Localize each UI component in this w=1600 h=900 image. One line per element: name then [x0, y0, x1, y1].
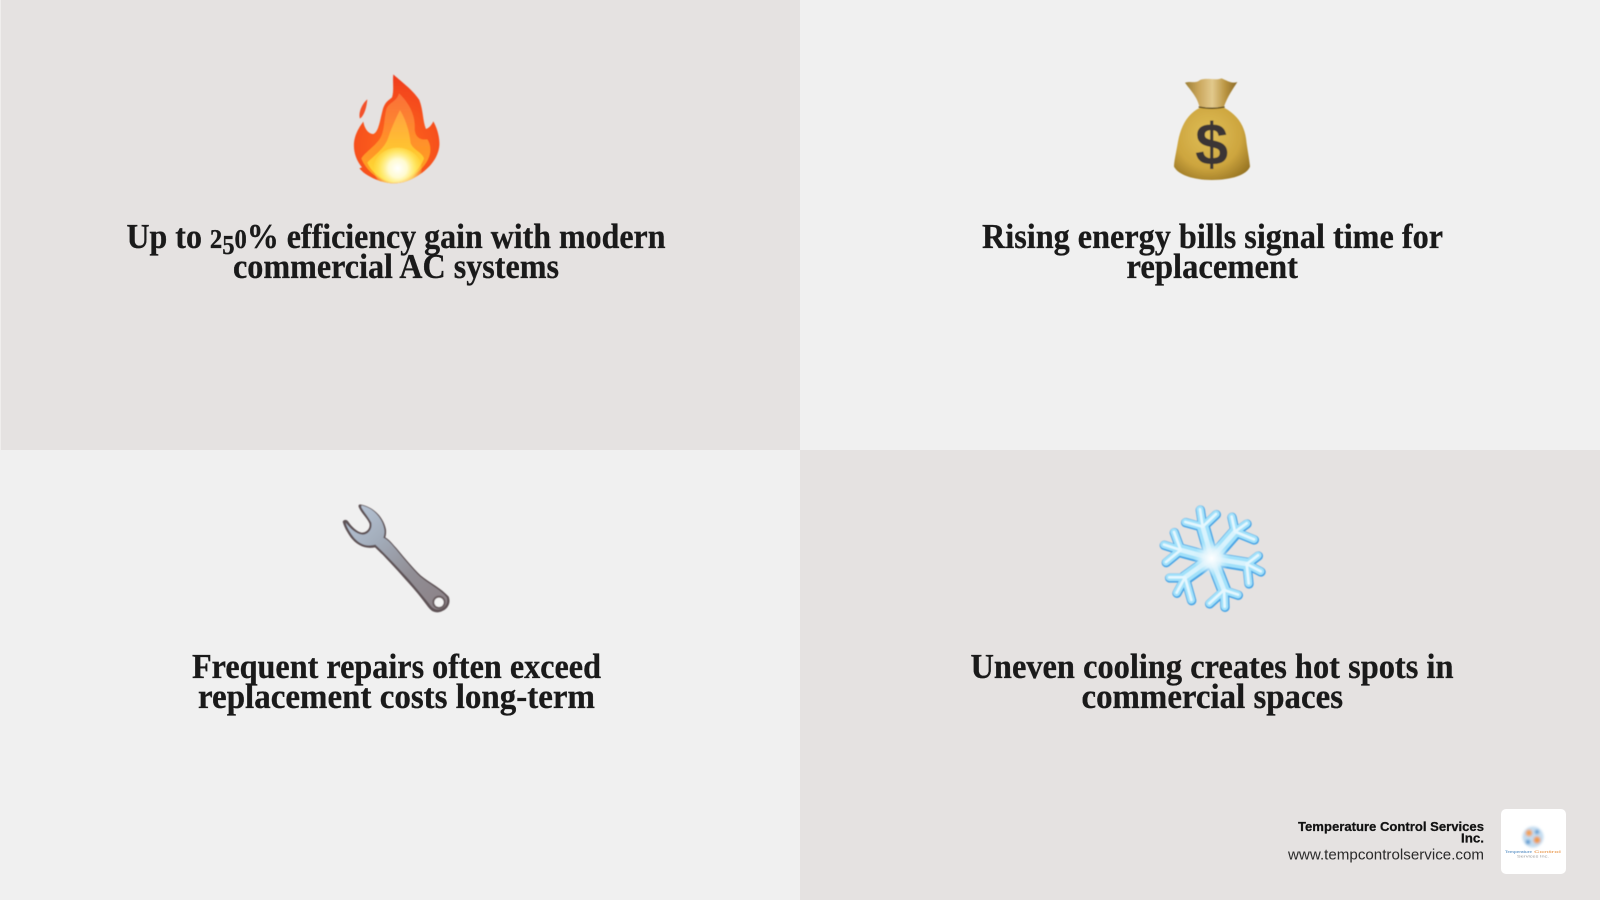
heading: energy bills: Rising energy bills signal time for: [982, 217, 1443, 256]
footer: company name and website: [1287, 819, 1484, 864]
panel: uneven cooling: [800, 450, 1600, 900]
icon: fire: [354, 74, 439, 189]
icon: money bag: [1174, 78, 1250, 180]
panel: efficiency: [0, 0, 800, 450]
icon: snowflake: [1164, 509, 1261, 607]
heading: efficiency: % efficiency gain with modern: [247, 217, 706, 256]
logo badge: [1501, 809, 1566, 874]
heading: repairs: Frequent repairs often exceed: [192, 647, 601, 686]
footer: company name and website: www.tempcontrolservice.com: [1287, 848, 1484, 864]
heading: efficiency: 0: [235, 224, 247, 254]
heading: uneven cooling: [970, 647, 1454, 716]
footer: company name and website: Inc.: [1461, 830, 1484, 846]
logo text: Control: [1534, 850, 1561, 854]
heading: repairs: [192, 647, 601, 716]
icon: wrench: [343, 504, 450, 612]
heading: energy bills: replacement: [1126, 247, 1298, 286]
logo text: Temperature: [1505, 850, 1532, 854]
icon: money bag: $: [1195, 110, 1228, 177]
footer: company name and website: Temperature Control Services: [1298, 819, 1484, 834]
logo mark: [1522, 826, 1544, 848]
panel: repairs: [0, 450, 800, 900]
logo text: [1505, 850, 1561, 858]
logo text: Services Inc.: [1517, 854, 1549, 858]
heading: efficiency: Up to 2: [126, 217, 223, 256]
heading: efficiency: [126, 217, 666, 286]
heading: uneven cooling: commercial spaces: [1082, 677, 1343, 716]
heading: repairs: replacement costs long-term: [198, 677, 595, 716]
heading: energy bills: [982, 217, 1443, 286]
heading: efficiency: 5: [222, 230, 235, 260]
heading: efficiency: commercial AC systems: [233, 247, 559, 286]
heading: uneven cooling: Uneven cooling creates hot spots in: [970, 647, 1454, 686]
panel: energy bills: [800, 0, 1600, 450]
